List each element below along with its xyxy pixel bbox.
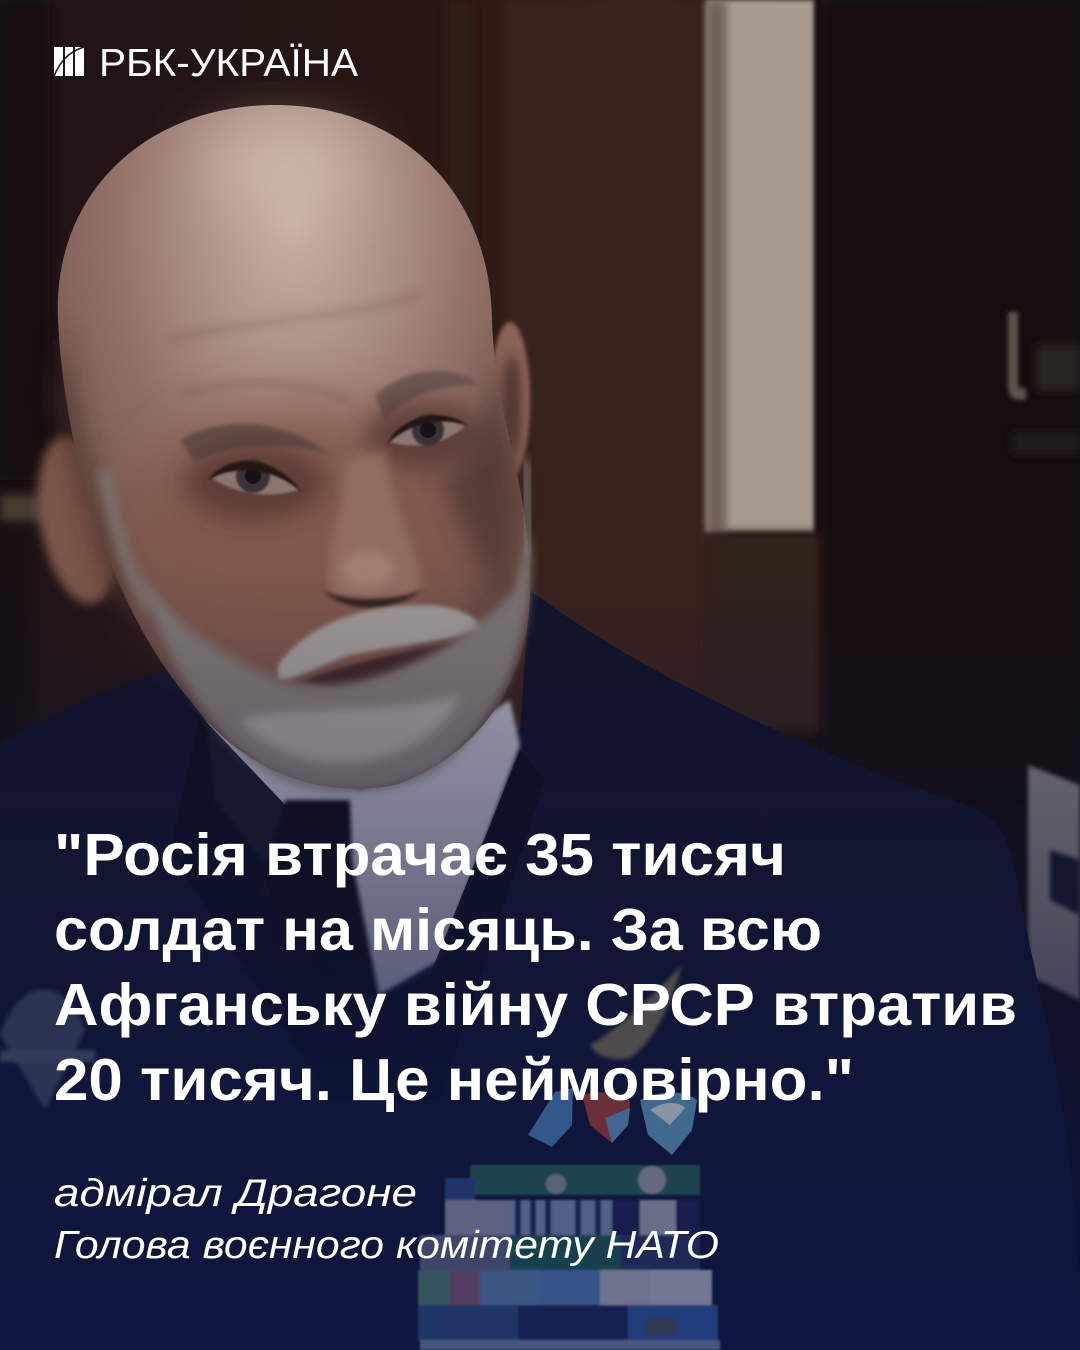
attribution — [54, 1172, 719, 1267]
quote line 1: "Росія втрачає 35 тисяч — [54, 822, 786, 888]
portrait: ears — [26, 322, 530, 610]
background sign at the right edge — [1008, 312, 1080, 1000]
uniform: ribbon rack — [418, 1165, 720, 1350]
portrait: head — [55, 105, 530, 789]
uniform: three shields — [528, 1088, 697, 1155]
logo wordmark: РБК-УКРАЇНА — [99, 42, 358, 85]
portrait: beard — [105, 460, 531, 792]
portrait: shirt and tie — [170, 700, 545, 1100]
portrait: nose and mouth — [278, 450, 483, 690]
uniform: parachute badge — [0, 989, 95, 1110]
logo mark — [54, 47, 84, 76]
portrait: jacket — [0, 590, 1080, 1350]
quote line 4: 20 тисяч. Це неймовірно." — [54, 1047, 854, 1113]
speaker role: Голова воєнного комітету НАТО — [54, 1224, 719, 1267]
speaker name: адмірал Драгоне — [54, 1172, 417, 1215]
portrait: eyes and brows — [180, 371, 485, 520]
logo — [54, 42, 358, 85]
quote — [54, 822, 1017, 1113]
uniform: wing pin — [590, 965, 682, 1059]
quote line 3: Афганську війну СРСР втратив — [54, 972, 1017, 1038]
quote line 2: солдат на місяць. За всю — [54, 897, 822, 963]
